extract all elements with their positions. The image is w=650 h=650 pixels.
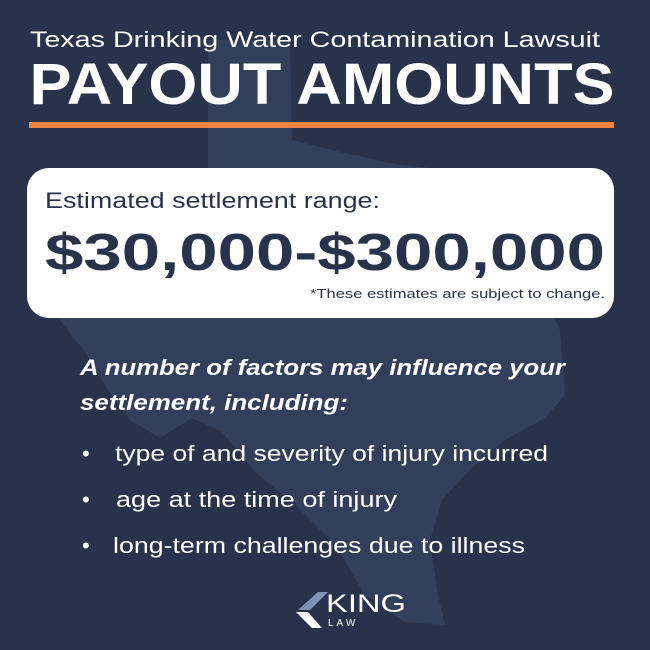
factors list: •	[82, 441, 90, 466]
factors list: age at the time of injury	[116, 487, 397, 512]
orange divider	[29, 122, 614, 128]
subtitle: Texas Drinking Water Contamination Lawsuit	[30, 27, 600, 52]
factors list: type of and severity of injury incurred	[115, 441, 548, 466]
range label: Estimated settlement range:	[45, 188, 380, 213]
factors heading: A number of factors may influence your	[79, 355, 567, 380]
factors list: •	[82, 533, 90, 558]
factors heading	[79, 355, 567, 415]
range amount: $30,000-$300,000	[45, 224, 605, 282]
factors list	[82, 441, 548, 558]
logo: King Law	[296, 590, 406, 629]
panel: settlement range	[27, 168, 614, 318]
factors heading: settlement, including:	[80, 390, 348, 415]
factors list: •	[82, 487, 90, 512]
background: texas map	[58, 40, 565, 625]
logo: King Law: LAW	[328, 618, 358, 629]
title: PAYOUT AMOUNTS	[30, 52, 614, 117]
factors list: long-term challenges due to illness	[113, 533, 525, 558]
logo: King Law: KING	[326, 590, 406, 618]
footnote: *These estimates are subject to change.	[310, 287, 605, 301]
